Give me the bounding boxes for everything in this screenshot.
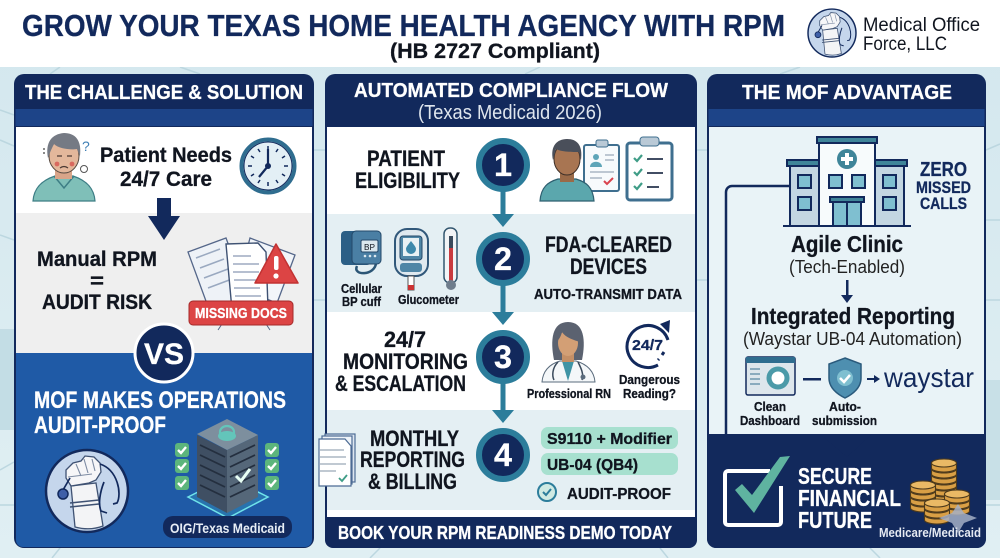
step 3 <box>335 320 680 401</box>
icon: dashboard <box>746 357 795 395</box>
missing docs label <box>189 301 293 325</box>
icon: clock <box>242 140 294 192</box>
icon: sick patient <box>33 133 95 201</box>
step 2 badge: 2 <box>494 241 512 277</box>
solution heading: MOF MAKES OPERATIONS <box>34 387 286 414</box>
icon: sick patient: ? <box>82 138 90 154</box>
panel: automated compliance flow <box>325 74 697 548</box>
step 4 label: MONTHLY <box>370 426 459 451</box>
medicare medicaid label: Medicare/Medicaid <box>879 525 981 540</box>
icon: document stack <box>319 434 355 486</box>
auto-submission label: submission <box>812 413 877 428</box>
panel subheading: (Texas Medicaid 2026) <box>418 102 602 124</box>
step 1 label: PATIENT <box>367 146 445 171</box>
company name: Medical Office <box>863 15 980 36</box>
icon: scattered documents <box>188 238 298 330</box>
panel: the challenge and solution <box>14 74 314 548</box>
auto-submission label <box>812 399 877 428</box>
step 3 badge: 3 <box>494 339 512 375</box>
panel heading: THE MOF ADVANTAGE <box>742 82 952 104</box>
icon: secure server <box>175 419 279 518</box>
subtitle: (HB 2727 Compliant) <box>390 40 600 63</box>
integrated reporting text: (Waystar UB-04 Automation) <box>743 329 962 349</box>
step 3 label: & ESCALATION <box>335 371 466 396</box>
icon: blood pressure cuff <box>341 231 381 273</box>
zero missed calls <box>916 159 971 213</box>
step 2 label: FDA-CLEARED <box>545 232 672 257</box>
arrow right <box>867 375 880 383</box>
arrow down <box>148 198 180 240</box>
flow arrows <box>492 190 514 423</box>
icon: professional nurse <box>542 322 595 382</box>
icon: glucometer <box>395 229 428 290</box>
icon: checked box <box>725 456 790 525</box>
arrow down <box>841 280 853 303</box>
icon: 24/7 cycle: 24/7 <box>632 337 663 354</box>
step 2 label: AUTO-TRANSMIT DATA <box>534 286 682 303</box>
solution heading <box>34 387 286 439</box>
icon: thermometer <box>444 228 457 290</box>
auto-submission label: Auto- <box>829 399 861 414</box>
step 3 label: MONITORING <box>343 349 468 374</box>
agile clinic text: Agile Clinic <box>791 231 903 257</box>
panel heading: THE CHALLENGE & SOLUTION <box>25 82 303 104</box>
footer call to action <box>325 517 697 548</box>
step 2 label: DEVICES <box>570 254 647 279</box>
professional rn label: Professional RN <box>527 386 611 401</box>
title: GROW YOUR TEXAS HOME HEALTH AGENCY WITH RPM <box>22 8 785 43</box>
missing docs label: MISSING DOCS <box>195 305 287 322</box>
secure future band <box>707 434 986 548</box>
solution heading: AUDIT-PROOF <box>34 412 166 439</box>
panel heading: AUTOMATED COMPLIANCE FLOW <box>354 80 668 102</box>
manual rpm text <box>37 248 157 314</box>
integrated reporting text: Integrated Reporting <box>751 303 955 329</box>
glucometer label: Glucometer <box>398 292 459 307</box>
step 2 <box>341 228 682 309</box>
step 4 badge <box>479 431 527 479</box>
logo <box>808 9 856 57</box>
dangerous reading label: Reading? <box>623 386 676 401</box>
waystar wordmark: waystar <box>883 362 974 393</box>
zero missed calls: CALLS <box>920 194 967 213</box>
header band: Force, LLC <box>863 34 947 55</box>
step 4 label <box>360 426 465 494</box>
icon: fist with stethoscope <box>46 450 128 532</box>
audit-proof check <box>538 483 671 503</box>
step 3 label: 24/7 <box>384 327 426 352</box>
connector dash <box>803 378 821 380</box>
integrated reporting text <box>743 303 962 349</box>
manual rpm text: AUDIT RISK <box>42 291 152 314</box>
secure financial future text <box>798 463 901 533</box>
zero missed calls: MISSED <box>916 178 971 197</box>
secure financial future text: SECURE <box>798 463 872 489</box>
clean dashboard label: Dashboard <box>740 413 800 428</box>
step 1 badge: 1 <box>494 147 512 183</box>
step 4 <box>360 426 678 503</box>
zero missed calls: ZERO <box>920 159 967 181</box>
secure financial future text: FINANCIAL <box>798 485 901 511</box>
step 1 label: ELIGIBILITY <box>355 168 460 193</box>
step 3 label <box>335 327 468 396</box>
step 3 badge <box>479 333 527 381</box>
icon: patient with clipboards <box>540 137 672 201</box>
icon: clinic building <box>783 137 911 226</box>
step 4 label: REPORTING <box>360 447 465 472</box>
agile clinic text <box>789 231 905 277</box>
step 1 <box>355 137 672 201</box>
step 2 badge <box>479 235 527 283</box>
icon: 24/7 cycle <box>627 320 670 368</box>
oig label <box>163 516 292 538</box>
clean dashboard label <box>740 399 800 428</box>
audit-proof check: AUDIT-PROOF <box>567 486 671 503</box>
sparkle <box>939 504 977 533</box>
billing code pill: ub-04 <box>541 453 678 475</box>
oig label: OIG/Texas Medicaid <box>170 520 285 536</box>
icon: shield <box>829 358 861 398</box>
billing code pill: ub-04: UB-04 (QB4) <box>547 457 638 474</box>
footer call to action: BOOK YOUR RPM READINESS DEMO TODAY <box>338 523 672 543</box>
vs badge <box>135 324 193 382</box>
panel: the mof advantage <box>707 74 986 548</box>
patient needs text: Patient Needs <box>100 144 232 167</box>
step 4 badge: 4 <box>494 437 512 473</box>
secure financial future text: FUTURE <box>798 507 872 533</box>
icon: blood pressure cuff: BP <box>364 243 375 252</box>
header band <box>0 0 1000 67</box>
cellular bp cuff label: BP cuff <box>342 294 382 309</box>
cellular bp cuff label: Cellular <box>341 281 382 296</box>
connector line <box>726 186 790 434</box>
manual rpm text: = <box>90 270 104 293</box>
step 2 label <box>534 232 682 303</box>
step 1 badge <box>479 141 527 189</box>
icon: coin stacks <box>910 459 970 524</box>
manual rpm text: Manual RPM <box>37 248 157 271</box>
step 4 label: & BILLING <box>368 469 457 494</box>
clean dashboard label: Clean <box>754 399 786 414</box>
panel: the challenge and solution: 24/7 Care <box>120 168 212 191</box>
dangerous reading label: Dangerous <box>619 372 680 387</box>
step 1 label <box>355 146 460 193</box>
vs badge: VS <box>144 338 184 371</box>
dangerous reading label <box>619 372 680 401</box>
billing code pill: s9110: S9110 + Modifier <box>547 431 672 448</box>
agile clinic text: (Tech-Enabled) <box>789 257 905 277</box>
cellular bp cuff label <box>341 281 382 309</box>
